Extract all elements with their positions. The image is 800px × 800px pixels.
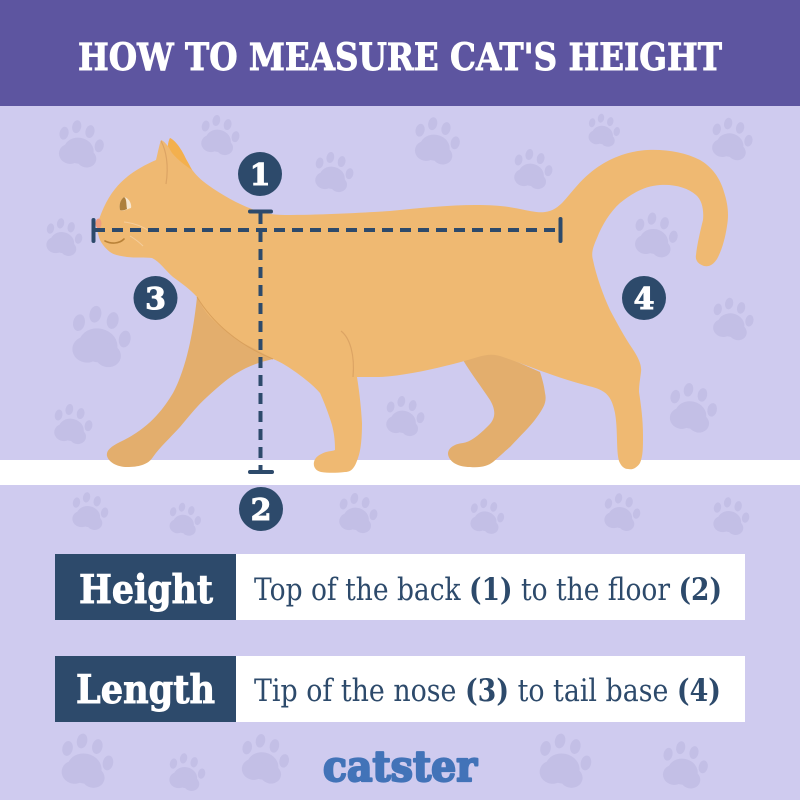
marker 1 xyxy=(238,152,282,196)
marker 1: 1 xyxy=(250,158,270,193)
length row xyxy=(55,656,745,722)
length label: Length xyxy=(76,667,215,713)
far back leg xyxy=(448,350,546,467)
height label: Height xyxy=(79,567,213,613)
orange ear xyxy=(168,138,192,170)
height measuring line xyxy=(250,212,272,472)
marker 4 xyxy=(622,276,666,320)
background paw prints xyxy=(42,111,757,793)
far front leg xyxy=(107,297,273,467)
cat illustration xyxy=(96,138,728,473)
title: HOW TO MEASURE CAT'S HEIGHT xyxy=(78,35,722,79)
cat body xyxy=(97,138,728,473)
chest crease xyxy=(197,297,273,359)
header band xyxy=(0,0,800,106)
floor xyxy=(0,460,800,485)
marker 3: 3 xyxy=(145,282,166,317)
height description: Top of the back (1) to the floor (2) xyxy=(254,572,722,608)
leg crease xyxy=(341,331,353,377)
length description: Tip of the nose (3) to tail base (4) xyxy=(254,673,721,709)
nose xyxy=(96,218,102,228)
length measuring line xyxy=(94,219,560,241)
eye xyxy=(120,197,131,211)
catster logo: catster xyxy=(323,742,478,791)
marker 2: 2 xyxy=(251,493,271,528)
marker 3 xyxy=(134,276,178,320)
whiskers xyxy=(124,222,149,246)
mouth xyxy=(105,239,124,243)
height row xyxy=(55,554,745,620)
marker 2 xyxy=(239,487,283,531)
marker 4: 4 xyxy=(634,282,654,317)
ear crease xyxy=(161,141,167,184)
